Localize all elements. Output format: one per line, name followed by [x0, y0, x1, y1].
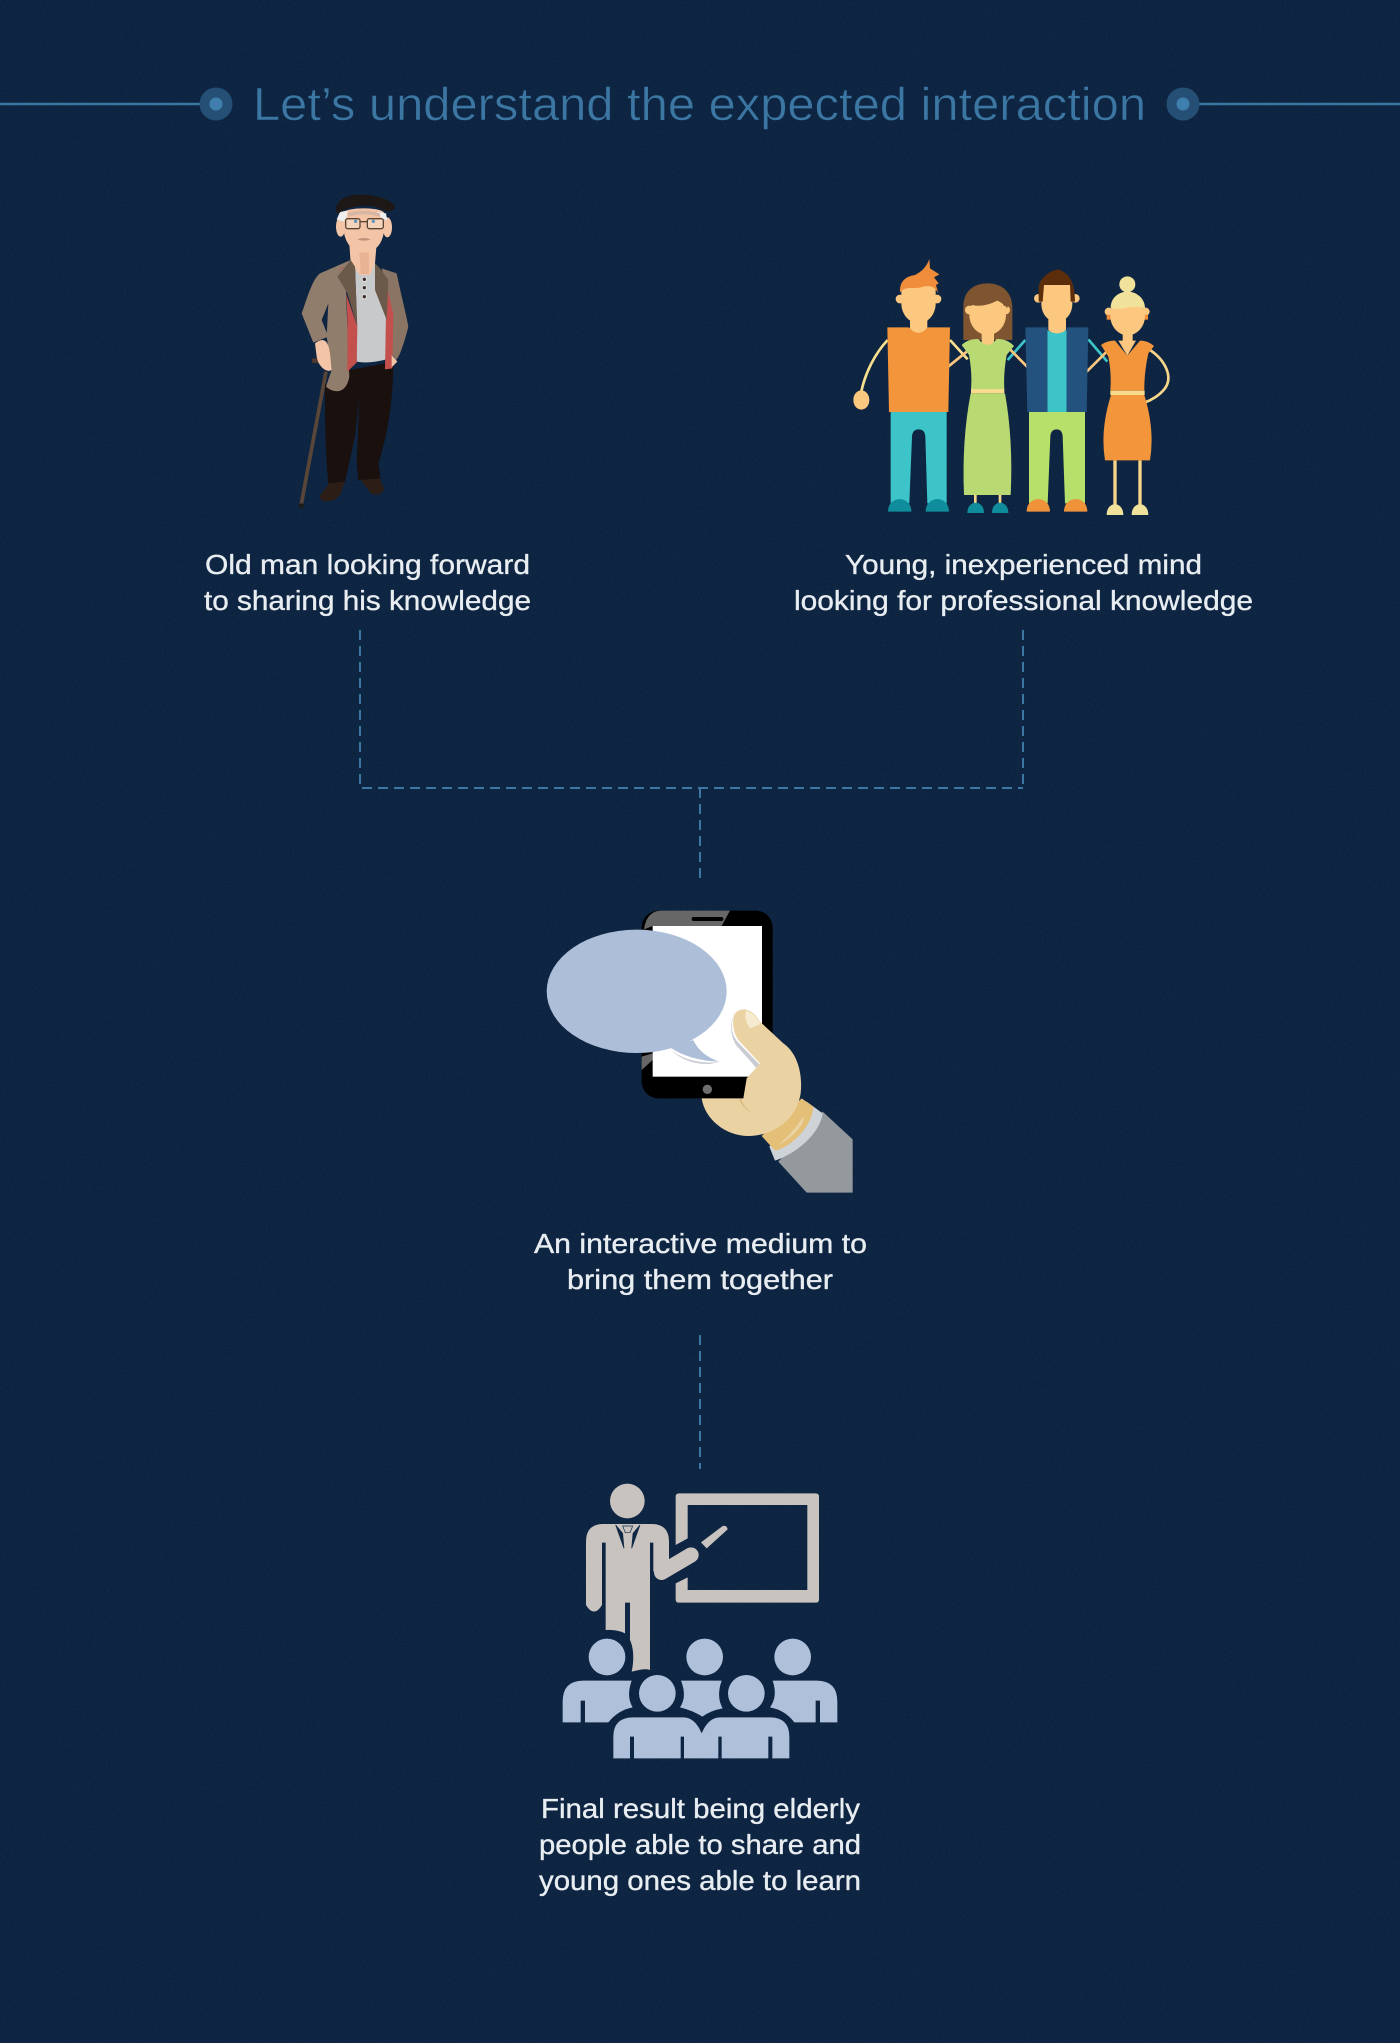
caption: old man: to sharing his knowledge [204, 585, 531, 616]
person 2 [962, 283, 1014, 513]
caption: final result: Final result being elderly [541, 1793, 860, 1824]
caption: interactive medium: bring them together [567, 1264, 833, 1295]
icon: teacher presenting to students [563, 1484, 837, 1758]
person 3 [1025, 269, 1088, 512]
caption: young people: looking for professional knowledge [794, 585, 1253, 616]
icon: hand holding phone with speech bubble [547, 911, 853, 1193]
students [563, 1639, 837, 1758]
icon: group of young people [853, 259, 1168, 515]
title banner: Let’s understand the expected interaction [253, 78, 1146, 130]
caption: young people [794, 549, 1253, 616]
teacher figure [586, 1484, 691, 1672]
caption: final result: people able to share and [539, 1829, 861, 1860]
connector: people to medium [360, 630, 1023, 878]
presentation board [676, 1493, 819, 1603]
icon: old man with cane [299, 195, 408, 509]
caption: final result: young ones able to learn [539, 1865, 861, 1896]
title banner [0, 78, 1400, 130]
person 1 [887, 259, 950, 512]
caption: interactive medium [534, 1228, 867, 1295]
caption: interactive medium: An interactive medium to [534, 1228, 867, 1259]
caption: final result [539, 1793, 861, 1896]
connector: medium to result [699, 1335, 701, 1469]
caption: old man [204, 549, 531, 616]
caption: young people: Young, inexperienced mind [845, 549, 1202, 580]
caption: old man: Old man looking forward [205, 549, 530, 580]
person 4 [1101, 276, 1154, 515]
